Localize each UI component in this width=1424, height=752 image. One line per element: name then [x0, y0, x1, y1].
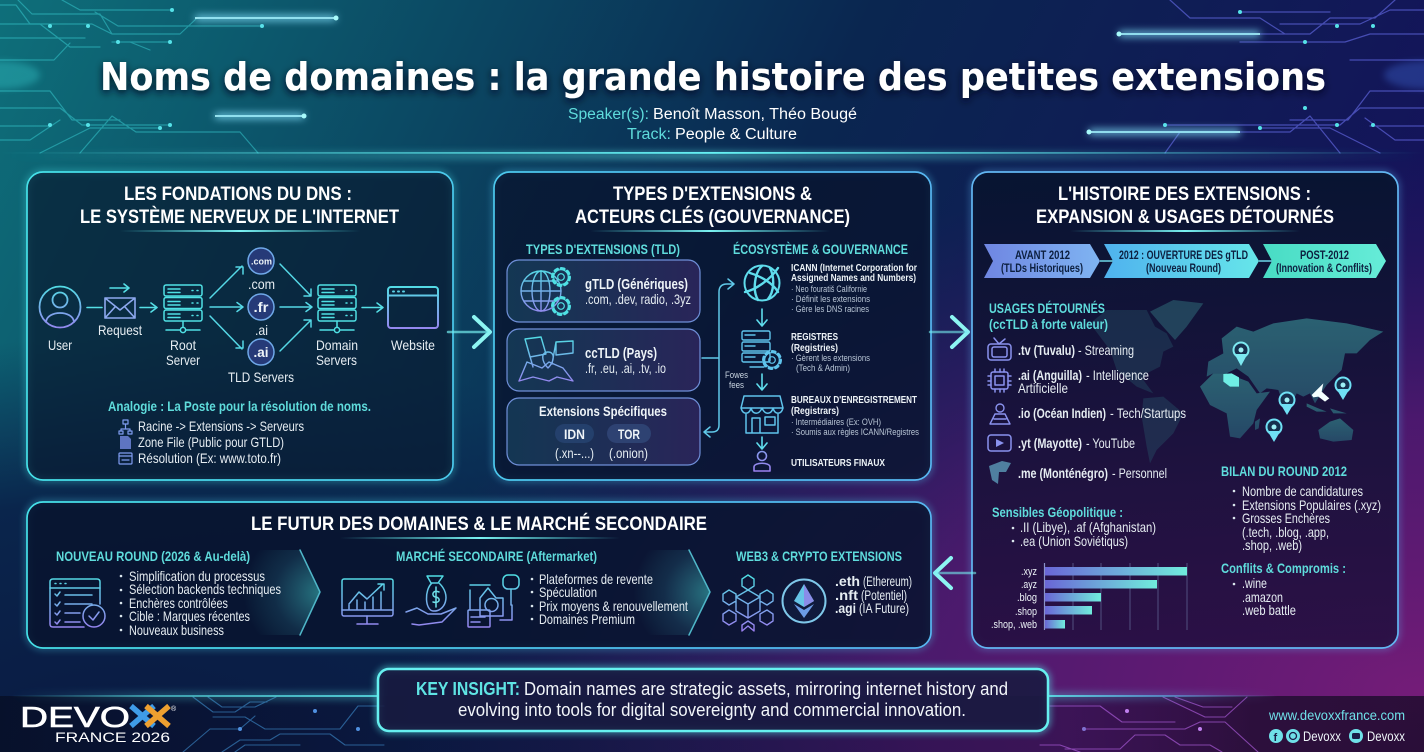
- list: new round: Enchères contrôlées: [129, 595, 228, 611]
- heading: extension types: ACTEURS CLÉS (GOUVERNANCE): [575, 206, 850, 228]
- text: ICANN: · Définit les extensions: [791, 294, 870, 304]
- separator chevron 1: [230, 550, 320, 635]
- list: web3 extensions: [835, 573, 912, 616]
- bar chart: .xyz: [1021, 566, 1037, 578]
- list item: .me: .me (Monténégro): [1018, 465, 1108, 481]
- timeline: before 2012: [984, 244, 1100, 278]
- list: round review: .shop, .web): [1242, 537, 1302, 553]
- text: registries: · Gèrent les extensions: [791, 353, 870, 363]
- text: registries: REGISTRES: [791, 331, 838, 343]
- column heading: ecosystem: ÉCOSYSTÈME & GOUVERNANCE: [733, 241, 908, 257]
- timeline: 2012 opening: (Nouveau Round): [1146, 263, 1221, 275]
- card: specific extensions: Extensions Spécifiques: [539, 403, 667, 419]
- icon: hierarchy: [119, 420, 132, 434]
- heading and list: geopolitics: .ea (Union Soviétiqus): [1020, 533, 1128, 549]
- timeline: post 2012: POST-2012: [1300, 250, 1349, 262]
- bar chart: .shop: [1015, 606, 1037, 618]
- timeline: post 2012: [1263, 244, 1386, 278]
- column heading: web3: WEB3 & CRYPTO EXTENSIONS: [736, 548, 902, 564]
- arrow: registrars to users: [757, 437, 767, 449]
- icon: checklist: [50, 579, 105, 627]
- text: registrars: · Soumis aux règles ICANN/Registres: [791, 427, 919, 437]
- icon: .ai TLD: [248, 339, 274, 365]
- analogy heading: Analogie : La Poste pour la résolution de noms.: [108, 398, 371, 414]
- arrow: panel 1 to panel 2: [440, 317, 490, 347]
- arrow: registries to registrars: [757, 374, 767, 390]
- list: new round: Sélection backends techniques: [129, 581, 281, 597]
- column heading: TLD types: TYPES D'EXTENSIONS (TLD): [526, 241, 680, 257]
- icon: root server: [164, 285, 202, 333]
- icon: .fr TLD: .fr: [254, 299, 269, 315]
- icon: end user: [754, 452, 770, 471]
- icon: website window: [388, 287, 438, 328]
- heading: foundations: LES FONDATIONS DU DNS :: [124, 184, 352, 205]
- card: ccTLD: [507, 329, 700, 391]
- pill: IDN: [555, 424, 594, 443]
- label: root server: Server: [166, 352, 200, 368]
- timeline: 2012 opening: 2012 : OUVERTURE DES gTLD: [1119, 250, 1248, 262]
- list item: .yt: [988, 435, 1135, 451]
- arrow: panel 3 to panel 4: [935, 558, 982, 588]
- heading and list: geopolitics: .II (Libye), .af (Afghanistan): [1020, 519, 1156, 535]
- list item: .io: .io (Océan Indien): [1018, 405, 1106, 421]
- label: .com: .com: [248, 276, 275, 292]
- list: web3 extensions: (IA Future): [859, 600, 909, 616]
- arrows from TLD to domain servers: [280, 264, 312, 351]
- list item: .yt: - YouTube: [1086, 435, 1135, 451]
- heading: diverted uses: [989, 300, 1108, 332]
- list: aftermarket: Domaines Premium: [539, 611, 635, 627]
- icon: youtube: [1349, 729, 1363, 743]
- heading: history: L'HISTOIRE DES EXTENSIONS :: [1058, 184, 1311, 205]
- icon: facebook: f: [1274, 732, 1278, 744]
- label: fees: Fowes: [725, 370, 748, 380]
- icon: .ai TLD: .ai: [254, 344, 268, 360]
- bar chart: .blog: [1017, 592, 1037, 604]
- icon: instagram: [1286, 729, 1300, 743]
- pill: IDN: IDN: [564, 426, 585, 442]
- list: aftermarket: Spéculation: [539, 584, 597, 600]
- card: gTLD: [507, 260, 700, 322]
- icon: blockchain cubes: [723, 575, 773, 631]
- panel: foundations of DNS: [27, 172, 453, 480]
- icon: storefront: [741, 396, 783, 433]
- speakers line: [568, 106, 857, 123]
- arrow: panel 2 to panel 3: [920, 317, 968, 347]
- icon: domain servers: [318, 285, 356, 333]
- bar chart: .shop, .web: [991, 619, 1037, 631]
- heading and list: geopolitics: [992, 504, 1156, 549]
- card: specific extensions: (.xn--...): [555, 445, 594, 461]
- heading and list: geopolitics: Sensibles Géopolitique :: [992, 504, 1123, 520]
- list: web3 extensions: .agi: [835, 600, 856, 616]
- heading: round review: BILAN DU ROUND 2012: [1221, 463, 1347, 479]
- icon: request envelope with arrows: [87, 284, 157, 318]
- connector: cards to governance: [702, 279, 734, 437]
- logo: Devoxx France 2026: FRANCE 2026: [55, 729, 170, 745]
- speakers line: Speaker(s):: [568, 106, 649, 123]
- footer: website and social: [1268, 707, 1405, 744]
- list: web3 extensions: (Potentiel): [861, 587, 907, 603]
- list: conflicts: .amazon: [1242, 589, 1283, 605]
- arrow: ICANN to registries: [757, 309, 767, 326]
- logo: Devoxx France 2026: [20, 702, 177, 745]
- list: new round: Cible : Marques récentes: [129, 608, 250, 624]
- list item: .ai: - Intelligence: [1086, 367, 1149, 383]
- list item: .tv: - Streaming: [1078, 342, 1134, 358]
- list item: .io: [990, 404, 1186, 424]
- icon: lock and cards: [468, 575, 519, 627]
- text: registries: [791, 331, 870, 373]
- label: .ai: .ai: [255, 322, 268, 338]
- list: conflicts: .web battle: [1242, 602, 1296, 618]
- column heading: new round: NOUVEAU ROUND (2026 & Au-delà): [56, 548, 250, 564]
- card: specific extensions: (.onion): [609, 445, 648, 461]
- card: ccTLD: .fr, .eu, .ai, .tv, .io: [585, 360, 666, 376]
- list: conflicts: [1233, 575, 1296, 618]
- list item: .me: [989, 461, 1167, 484]
- bar chart: .ayz: [1021, 579, 1037, 591]
- list item: .tv: .tv (Tuvalu): [1018, 342, 1075, 358]
- icon: .com TLD: .com: [251, 256, 272, 268]
- footer: website and social: Devoxx: [1367, 729, 1405, 744]
- text: registries: (Registries): [791, 342, 838, 354]
- list item: .ai: [988, 367, 1149, 396]
- text: ICANN: · Gère les DNS racines: [791, 304, 869, 314]
- heading: extension types: TYPES D'EXTENSIONS &: [613, 184, 812, 205]
- icon: resolution window: [119, 453, 132, 464]
- logo: Devoxx France 2026: ®: [171, 705, 177, 713]
- heading: diverted uses: USAGES DÉTOURNÉS: [989, 300, 1105, 316]
- column heading: aftermarket: MARCHÉ SECONDAIRE (Aftermarket): [396, 548, 597, 564]
- heading: extension types: [575, 184, 850, 232]
- title: Noms de domaines : la grande histoire des petites extensions: [100, 55, 1326, 100]
- label: domain servers: [316, 337, 358, 368]
- list: aftermarket: Plateformes de revente: [539, 571, 653, 587]
- text: ICANN: ICANN (Internet Corporation for: [791, 262, 917, 274]
- list: round review: (.tech, .blog, .app,: [1242, 524, 1329, 540]
- list: round review: Extensions Populaires (.xyz): [1242, 497, 1381, 513]
- text: ICANN: · Neo fouratiš Californie: [791, 284, 867, 294]
- list: web3 extensions: .eth: [835, 573, 860, 589]
- timeline: post 2012: (Innovation & Conflits): [1276, 263, 1372, 275]
- label: fees: fees: [729, 380, 744, 390]
- text: end users: UTILISATEURS FINAUX: [791, 457, 885, 469]
- callout: key insight: [378, 669, 1048, 731]
- pill: TOR: [607, 424, 651, 443]
- icon: money bag on hand: [406, 576, 456, 625]
- analogy list: Racine -> Extensions -> Serveurs: [138, 418, 304, 434]
- callout: key insight: Domain names are strategic assets, mirroring internet history and: [524, 678, 1008, 699]
- track line: Track:: [627, 126, 671, 143]
- speakers line: Benoît Masson, Théo Bougé: [653, 106, 857, 123]
- label: request: Request: [98, 322, 142, 338]
- list: round review: Grosses Enchères: [1242, 510, 1330, 526]
- card: gTLD: gTLD (Génériques): [585, 276, 688, 293]
- list: new round: Nouveaux business: [129, 622, 224, 638]
- label: root server: [166, 337, 200, 368]
- map pin: Indian Ocean: [1280, 392, 1294, 415]
- icon: registry server with gear: [742, 331, 780, 368]
- icon: ICANN globe: [744, 266, 780, 300]
- list: new round: Simplification du processus: [129, 568, 265, 584]
- callout: key insight: KEY INSIGHT:: [416, 678, 520, 699]
- card: gTLD: .com, .dev, radio, .3yz: [585, 291, 691, 307]
- label: domain servers: Domain: [316, 337, 358, 353]
- heading: history: EXPANSION & USAGES DÉTOURNÉS: [1036, 206, 1334, 228]
- list: aftermarket: Prix moyens & renouvellement: [539, 598, 688, 614]
- label: domain servers: Servers: [316, 352, 357, 368]
- card: specific extensions: [507, 398, 700, 465]
- list item: .me: - Personnel: [1112, 465, 1167, 481]
- timeline connectors: [1100, 260, 1272, 262]
- list item: .ai: Artificielle: [1018, 380, 1068, 396]
- label: fees: [725, 370, 748, 390]
- timeline: before 2012: AVANT 2012: [1015, 250, 1070, 262]
- map pin: Mayotte: [1266, 420, 1282, 442]
- list: new round: [120, 568, 281, 638]
- track line: People & Culture: [675, 126, 797, 143]
- list: conflicts: .wine: [1242, 575, 1267, 591]
- timeline: 2012 opening: [1104, 244, 1259, 278]
- text: ICANN: [791, 262, 917, 314]
- world map: [1090, 300, 1383, 463]
- text: registrars: BUREAUX D'ENREGISTREMENT: [791, 394, 917, 406]
- icon: zone file: [120, 436, 131, 449]
- list item: .yt: .yt (Mayotte): [1018, 435, 1082, 451]
- icon: globe with gears: [521, 268, 570, 314]
- heading: history: [1036, 184, 1334, 232]
- icon: map with flags and pin: [519, 337, 573, 381]
- track line: [627, 126, 797, 143]
- label: TLD servers: TLD Servers: [228, 369, 294, 385]
- analogy list: Zone File (Public pour GTLD): [138, 434, 284, 450]
- heading: future: LE FUTUR DES DOMAINES & LE MARCHÉ SECONDAIRE: [251, 513, 707, 535]
- text: registrars: (Registrars): [791, 405, 839, 417]
- separator chevron 2: [620, 550, 710, 635]
- arrows from root to TLD: [210, 266, 243, 349]
- timeline: before 2012: (TLDs Historiques): [1001, 263, 1083, 275]
- footer: website and social: www.devoxxfrance.com: [1268, 707, 1405, 723]
- analogy list: [119, 418, 304, 466]
- logo: Devoxx France 2026: DEVO: [20, 702, 130, 734]
- label: root server: Root: [170, 337, 196, 353]
- heading: foundations: LE SYSTÈME NERVEUX DE L'INTERNET: [80, 206, 399, 228]
- icon: .fr TLD: [248, 294, 274, 320]
- map pin: Europe: [1234, 342, 1248, 366]
- list: round review: [1233, 483, 1381, 553]
- text: registrars: · Intermédiaires (Ex: OVH): [791, 417, 881, 427]
- heading: foundations: [80, 184, 399, 232]
- list: web3 extensions: .nft: [835, 587, 858, 603]
- arrow to website: [362, 303, 383, 312]
- panel: future of domains: [27, 502, 931, 648]
- text: registrars: [791, 394, 919, 437]
- analogy list: Résolution (Ex: www.toto.fr): [138, 450, 281, 466]
- list item: .tv: [988, 338, 1134, 360]
- bar chart: [991, 563, 1187, 631]
- list item: .ai: .ai (Anguilla): [1018, 367, 1082, 383]
- label: website: Website: [391, 337, 435, 353]
- icon: ethereum: [782, 580, 826, 622]
- list: web3 extensions: (Ethereum): [863, 573, 912, 589]
- list: round review: Nombre de candidatures: [1242, 483, 1363, 499]
- callout: key insight: evolving into tools for digital sovereignty and commercial innovation.: [458, 699, 966, 720]
- card: ccTLD: ccTLD (Pays): [585, 345, 657, 362]
- heading: diverted uses: (ccTLD à forte valeur): [989, 316, 1108, 332]
- list: aftermarket: [531, 571, 688, 627]
- text: ICANN: Assigned Names and Numbers): [791, 272, 916, 284]
- footer: website and social: Devoxx: [1303, 729, 1341, 744]
- heading: conflicts: Conflits & Compromis :: [1221, 560, 1346, 576]
- pill: TOR: TOR: [618, 426, 640, 442]
- icon: chart monitor: [342, 579, 393, 624]
- list item: .io: - Tech/Startups: [1110, 405, 1186, 421]
- label: user: User: [48, 337, 72, 353]
- text: registries: (Tech & Admin): [796, 363, 850, 373]
- map pin: Pacific: [1336, 378, 1350, 400]
- panel: history of extensions: [972, 172, 1398, 648]
- panel: extension types and governance: [494, 172, 931, 480]
- icon: user: [40, 286, 80, 328]
- icon: .com TLD: [248, 248, 274, 274]
